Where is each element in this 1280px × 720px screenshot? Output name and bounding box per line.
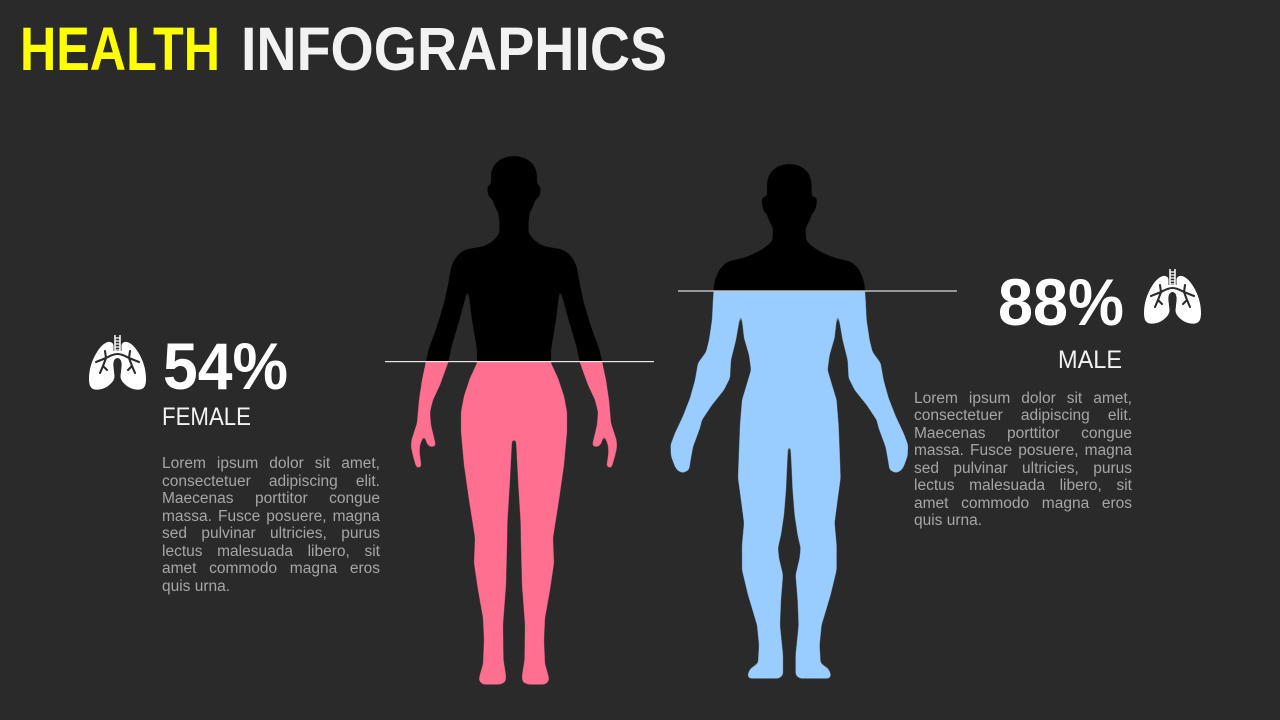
female label: FEMALE (162, 403, 251, 431)
female description text: Maecenas porttitor congue (162, 490, 380, 507)
male label: MALE (1058, 346, 1122, 374)
male description text: lectus malesuada libero, sit (914, 477, 1132, 494)
female description text: lectus malesuada libero, sit (162, 543, 380, 560)
male description text: massa. Fusce posuere, magna (914, 442, 1132, 459)
female body figure (411, 156, 617, 684)
female silhouette upper part (426, 156, 602, 361)
male description text: Maecenas porttitor congue (914, 424, 1132, 442)
female filled lower part (411, 362, 617, 685)
male description text (914, 390, 1132, 529)
female description text: sed pulvinar ultricies, purus (162, 525, 380, 542)
female description text: quis urna. (162, 578, 230, 595)
male body figure (670, 164, 908, 678)
icon: female lungs (89, 335, 146, 390)
male percentage: 88% (998, 265, 1124, 339)
female description text: consectetuer adipiscing elit. (162, 473, 380, 490)
title: HEALTH (20, 15, 220, 83)
male silhouette upper part (714, 164, 865, 290)
male description text: Lorem ipsum dolor sit amet, (914, 390, 1132, 406)
female description text: Lorem ipsum dolor sit amet, (162, 455, 380, 472)
male level line (678, 290, 957, 292)
female description text (162, 455, 380, 595)
male filled lower part (670, 292, 908, 679)
title: INFOGRAPHICS (241, 15, 667, 83)
male description text: amet commodo magna eros (914, 494, 1132, 512)
male description text: sed pulvinar ultricies, purus (914, 460, 1132, 476)
male description text: consectetuer adipiscing elit. (914, 407, 1132, 424)
female level line (385, 361, 654, 362)
female percentage: 54% (163, 329, 288, 403)
female description text: massa. Fusce posuere, magna (162, 508, 380, 525)
female description text: amet commodo magna eros (162, 560, 380, 577)
icon: male lungs (1144, 269, 1201, 324)
male description text: quis urna. (914, 512, 982, 529)
